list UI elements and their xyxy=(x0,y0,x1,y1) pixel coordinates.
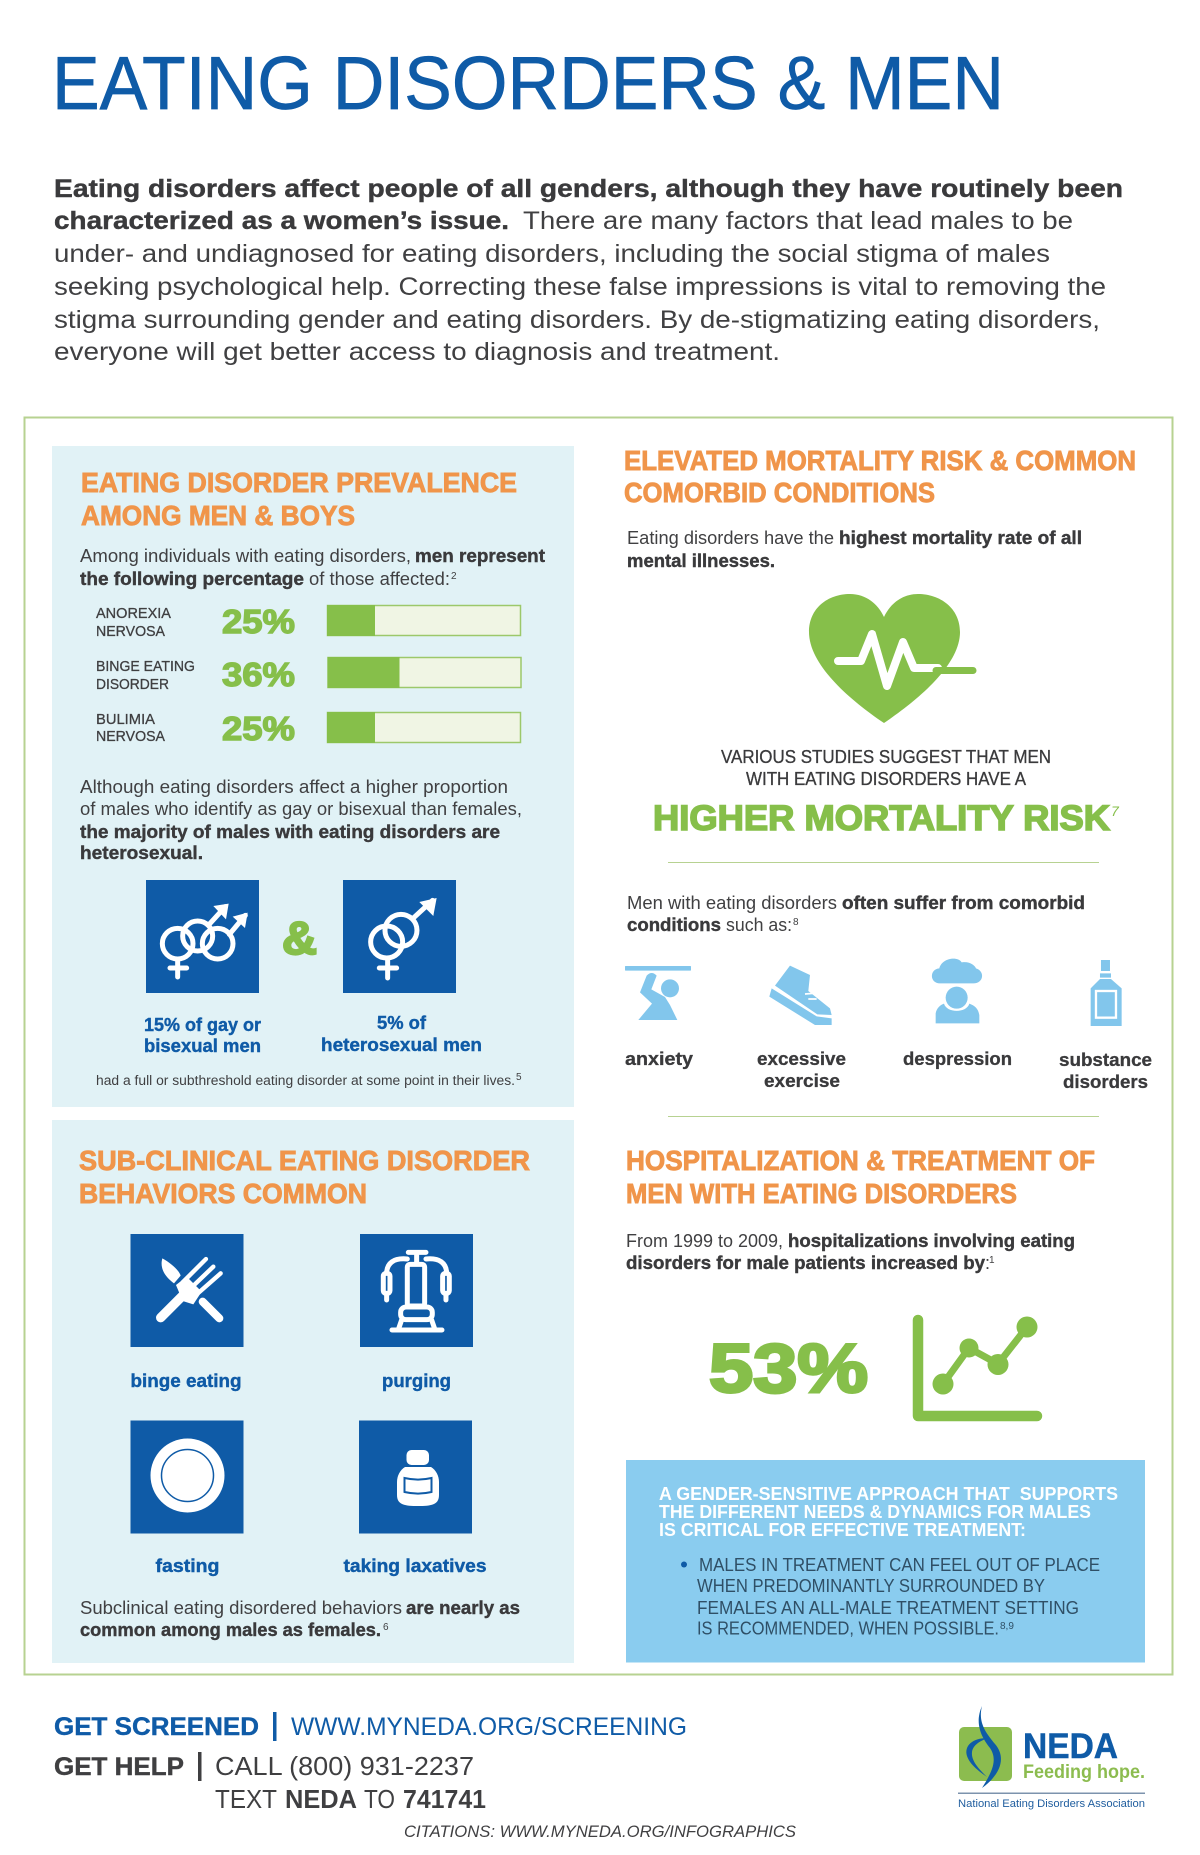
label: taking laxatives: taking laxatives xyxy=(344,1556,486,1576)
label: gay or bisexual xyxy=(144,1015,261,1056)
icon: binge eating xyxy=(130,1234,244,1347)
icon: fasting xyxy=(130,1420,244,1534)
heading: hospitalization xyxy=(626,1145,1095,1209)
text: comorbid intro: such as: xyxy=(726,915,792,935)
footer: get help: NEDA xyxy=(285,1784,357,1814)
label: gay or bisexual: 15% of gay or xyxy=(144,1015,261,1035)
heading: mortality: ELEVATED MORTALITY RISK & COMMON xyxy=(624,445,1136,476)
heading: hospitalization: MEN WITH EATING DISORDERS xyxy=(626,1178,1017,1209)
bar row: binge eating disorder: BINGE EATING xyxy=(96,658,195,675)
panel: sub-clinical behaviors xyxy=(52,1120,574,1663)
text: hospitalization intro: From 1999 to 2009, xyxy=(626,1231,783,1251)
text: percentage intro: of those affected: xyxy=(309,569,450,589)
callout heading xyxy=(659,1484,1118,1540)
icon: rising line chart xyxy=(918,1316,1038,1416)
text: orientation paragraph: Although eating disorders affect a higher proportion xyxy=(80,777,508,797)
intro paragraph: stigma surrounding gender and eating disorders. By de-stigmatizing eating disorders, xyxy=(54,306,1100,334)
bar row: binge eating disorder xyxy=(96,656,521,693)
icon: heart with pulse xyxy=(809,594,973,723)
intro paragraph: There are many factors that lead males to be xyxy=(523,207,1073,235)
text: comorbid intro xyxy=(627,893,1085,935)
footer: get help: CALL (800) 931-2237 xyxy=(215,1751,474,1781)
stat: 53 percent: 53% xyxy=(709,1330,868,1407)
main frame xyxy=(24,418,1172,1674)
bar row: bulimia nervosa: NERVOSA xyxy=(96,728,165,745)
callout bullet: FEMALES AN ALL-MALE TREATMENT SETTING xyxy=(697,1597,1079,1618)
text: subclinical: 6 xyxy=(383,1622,389,1633)
callout: higher mortality risk: HIGHER MORTALITY RISK xyxy=(653,799,1110,838)
callout heading: A GENDER-SENSITIVE APPROACH THAT SUPPORTS xyxy=(659,1484,1118,1504)
text: hospitalization intro: 1 xyxy=(989,1255,995,1266)
title: EATING DISORDERS & MEN xyxy=(52,41,1004,125)
bar row: bulimia nervosa xyxy=(96,710,520,747)
label: purging: purging xyxy=(382,1371,451,1391)
callout bullet: 8,9 xyxy=(1000,1621,1014,1632)
heading: sub-clinical: BEHAVIORS COMMON xyxy=(79,1178,367,1209)
icon: excessive exercise xyxy=(769,966,832,1025)
intro paragraph: everyone will get better access to diagnosis and treatment. xyxy=(54,338,780,366)
footer: get screened xyxy=(54,1712,687,1741)
text: subclinical: common among males as females. xyxy=(80,1620,381,1640)
label: binge eating: binge eating xyxy=(130,1371,242,1391)
intro paragraph: seeking psychological help. Correcting these false impressions is vital to removing the xyxy=(54,273,1106,301)
logo: NEDA: NEDA xyxy=(1023,1727,1118,1766)
text: hospitalization intro: disorders for male patients increased by xyxy=(626,1253,985,1273)
intro paragraph xyxy=(54,175,1123,366)
ampersand: & xyxy=(282,912,317,964)
text: orientation paragraph: heterosexual. xyxy=(80,843,203,863)
bar row: binge eating disorder: 36% xyxy=(222,656,295,693)
label: substance disorders xyxy=(1059,1050,1152,1092)
footer: get help: GET HELP xyxy=(54,1753,184,1781)
bar row: binge eating disorder: DISORDER xyxy=(96,676,169,693)
text: percentage intro xyxy=(80,546,545,589)
text: mortality intro: highest mortality rate of all xyxy=(839,528,1082,548)
text: orientation paragraph: of males who identify as gay or bisexual than females, xyxy=(80,799,522,819)
text: mortality intro: Eating disorders have the xyxy=(627,528,834,548)
text: hospitalization intro: hospitalizations involving eating xyxy=(788,1231,1075,1251)
heading: mortality xyxy=(624,445,1136,508)
heading: prevalence xyxy=(81,467,517,531)
label: anxiety: anxiety xyxy=(625,1049,693,1069)
callout heading: THE DIFFERENT NEEDS & DYNAMICS FOR MALES xyxy=(659,1502,1091,1522)
panel: prevalence xyxy=(52,446,574,1107)
footnote: 5 xyxy=(516,1072,522,1083)
footnote: had a full or subthreshold eating disorder at some point in their lives. xyxy=(96,1073,515,1088)
text: subclinical xyxy=(80,1598,520,1640)
text: hospitalization intro: : xyxy=(985,1253,990,1273)
icon: heterosexual symbols xyxy=(343,880,456,993)
footer: get help xyxy=(54,1751,486,1814)
label: excessive exercise xyxy=(757,1049,846,1091)
text: various studies: VARIOUS STUDIES SUGGEST THAT MEN xyxy=(721,747,1051,767)
bar row: anorexia nervosa xyxy=(96,603,520,640)
heading: sub-clinical xyxy=(79,1145,530,1209)
text: percentage intro: 2 xyxy=(451,571,457,582)
section: mortality xyxy=(624,445,1152,1092)
icon: gay or bisexual symbols xyxy=(146,880,259,993)
label: substance disorders: disorders xyxy=(1063,1072,1148,1092)
callout bullet: IS RECOMMENDED, WHEN POSSIBLE. xyxy=(697,1618,999,1638)
icon: depression xyxy=(932,959,982,1023)
footer: get help: 741741 xyxy=(403,1784,486,1814)
footer: get screened: WWW.MYNEDA.ORG/SCREENING xyxy=(291,1713,687,1741)
text: comorbid intro: conditions xyxy=(627,915,721,935)
heading: hospitalization: HOSPITALIZATION & TREATMENT OF xyxy=(626,1145,1095,1176)
callout: gender-sensitive approach xyxy=(626,1460,1145,1662)
label: fasting: fasting xyxy=(156,1556,220,1576)
footer: get help: TEXT xyxy=(215,1784,277,1814)
icon: substance disorders xyxy=(1091,960,1122,1026)
heading: mortality: COMORBID CONDITIONS xyxy=(624,477,935,508)
logo: NEDA: Feeding hope. xyxy=(1023,1762,1145,1783)
text: orientation paragraph: the majority of males with eating disorders are xyxy=(80,822,500,842)
heading: prevalence: EATING DISORDER PREVALENCE xyxy=(81,467,517,498)
footer: get screened: GET SCREENED xyxy=(54,1713,259,1741)
text: various studies xyxy=(721,747,1051,789)
label: heterosexual: heterosexual men xyxy=(321,1035,482,1055)
text: comorbid intro: Men with eating disorders xyxy=(627,893,837,913)
text: mortality intro xyxy=(627,528,1082,571)
label: gay or bisexual: bisexual men xyxy=(144,1036,261,1056)
citations: CITATIONS: WWW.MYNEDA.ORG/INFOGRAPHICS xyxy=(404,1822,797,1841)
text: hospitalization intro xyxy=(626,1231,1075,1273)
text: various studies: WITH EATING DISORDERS HAVE A xyxy=(746,769,1026,789)
callout heading: IS CRITICAL FOR EFFECTIVE TREATMENT: xyxy=(659,1520,1026,1540)
text: orientation paragraph xyxy=(80,777,522,863)
callout bullet: WHEN PREDOMINANTLY SURROUNDED BY xyxy=(697,1575,1045,1596)
callout bullet xyxy=(681,1554,1100,1638)
bar row: anorexia nervosa: 25% xyxy=(222,603,295,640)
heading: prevalence: AMONG MEN & BOYS xyxy=(81,500,355,531)
text: subclinical: Subclinical eating disordered behaviors xyxy=(80,1598,402,1618)
bar row: bulimia nervosa: BULIMIA xyxy=(96,711,155,728)
callout bullet: MALES IN TREATMENT CAN FEEL OUT OF PLACE xyxy=(699,1554,1100,1575)
bar row: anorexia nervosa: ANOREXIA xyxy=(96,605,171,622)
callout: higher mortality risk: 7 xyxy=(1111,803,1120,819)
label: excessive exercise: excessive xyxy=(757,1049,846,1069)
label: excessive exercise: exercise xyxy=(764,1071,840,1091)
section: hospitalization xyxy=(626,1145,1145,1662)
text: percentage intro: Among individuals with eating disorders, xyxy=(80,546,411,566)
intro paragraph: under- and undiagnosed for eating disorders, including the social stigma of males xyxy=(54,240,1050,268)
bar row: bulimia nervosa: 25% xyxy=(222,710,295,747)
text: subclinical: are nearly as xyxy=(406,1598,520,1618)
text: comorbid intro: often suffer from comorbid xyxy=(842,893,1085,913)
icon: taking laxatives xyxy=(359,1420,472,1534)
text: comorbid intro: 8 xyxy=(793,917,799,928)
text: percentage intro: the following percentage xyxy=(80,569,304,589)
logo: NEDA xyxy=(958,1706,1145,1810)
heading: sub-clinical: SUB-CLINICAL EATING DISORDER xyxy=(79,1145,530,1176)
text: percentage intro: men represent xyxy=(415,546,545,566)
bar row: anorexia nervosa: NERVOSA xyxy=(96,623,165,640)
label: heterosexual: 5% of xyxy=(377,1013,427,1033)
footer: get help: TO xyxy=(364,1784,395,1814)
logo: NEDA: National Eating Disorders Association xyxy=(958,1798,1145,1810)
icon: anxiety xyxy=(625,966,691,1020)
intro paragraph: characterized as a women’s issue. xyxy=(54,207,509,235)
label: heterosexual xyxy=(321,1013,482,1055)
label: substance disorders: substance xyxy=(1059,1050,1152,1070)
label: depression: despression xyxy=(903,1049,1012,1069)
intro paragraph: Eating disorders affect people of all genders, although they have routinely been xyxy=(54,175,1123,203)
icon: purging xyxy=(360,1234,473,1347)
text: mortality intro: mental illnesses. xyxy=(627,551,775,571)
